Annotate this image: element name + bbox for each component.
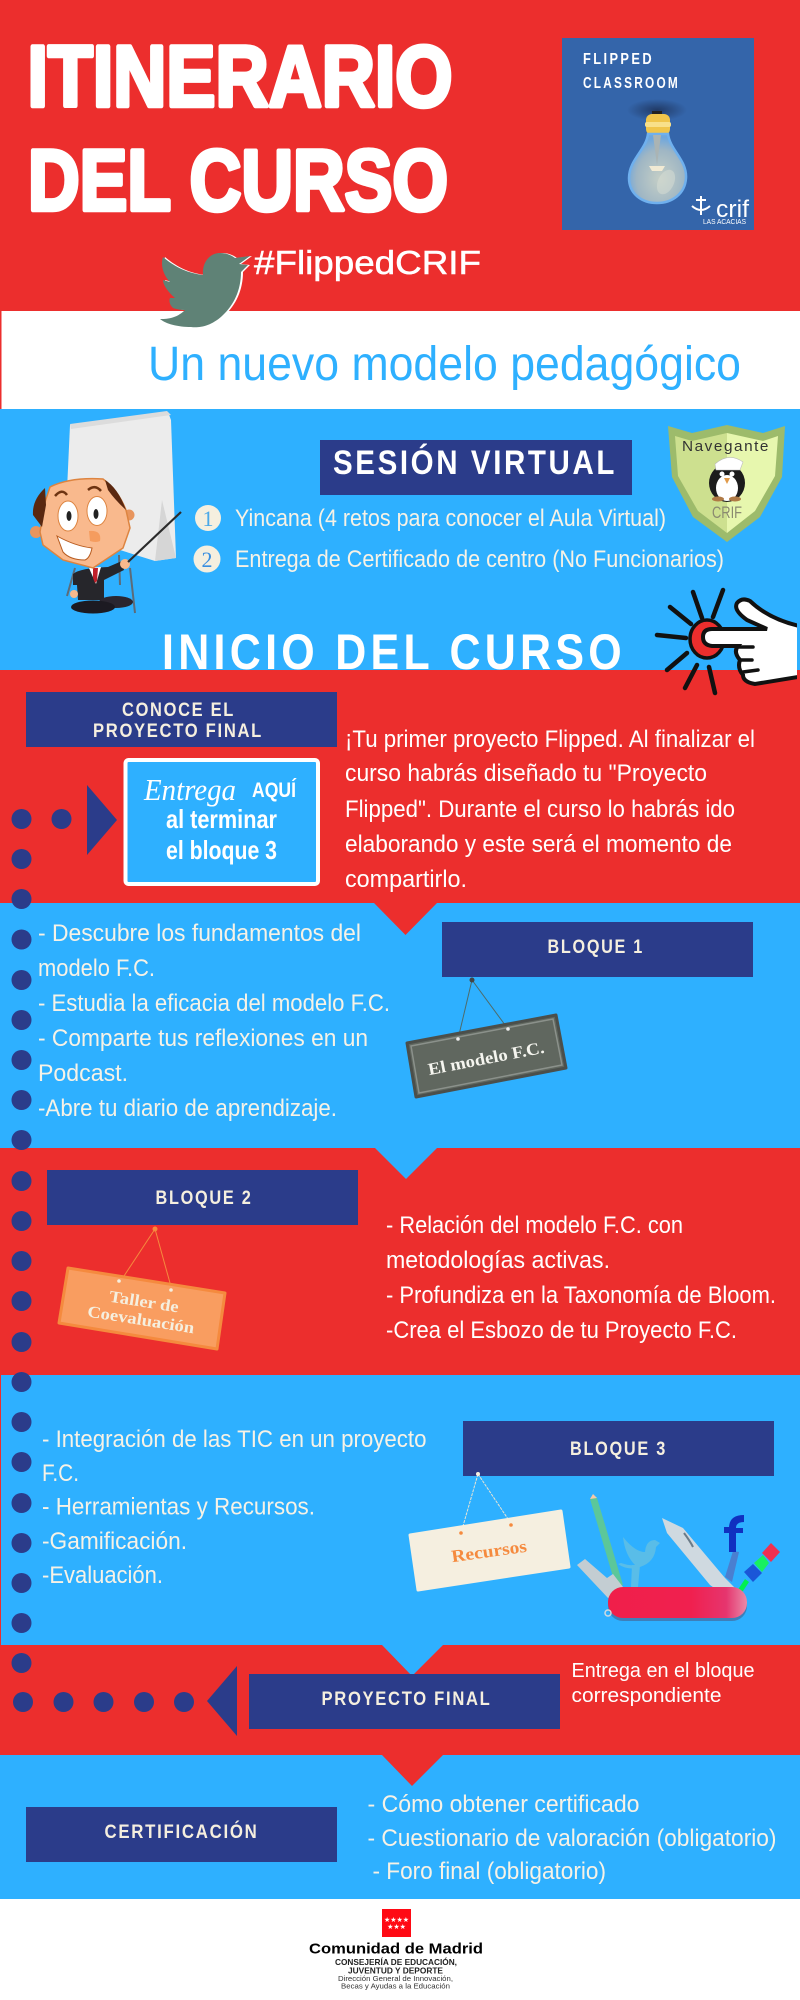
list item 1: 1	[202, 506, 214, 531]
callout: entrega aquí: el bloque 3	[166, 835, 277, 865]
text: bloque 2 contents	[386, 1212, 776, 1344]
text: certificación contents: - Cómo obtener certificado	[368, 1791, 640, 1818]
text: bloque 1 contents: modelo F.C.	[38, 955, 155, 982]
arrow: red notch	[374, 903, 437, 935]
heading: bloque 1: BLOQUE 1	[548, 937, 644, 958]
panel: certificación	[0, 1755, 800, 1899]
text: bloque 3 contents: F.C.	[42, 1460, 79, 1487]
text: proyecto flipped	[345, 726, 755, 893]
icon: flipped classroom poster: crif	[716, 196, 749, 223]
text: proyecto flipped: ¡Tu primer proyecto Flipped. Al finalizar el	[345, 726, 755, 753]
sign: el modelo f.c.	[407, 978, 566, 1097]
text: bloque 2 contents: -Crea el Esbozo de tu Proyecto F.C.	[386, 1317, 737, 1344]
text: bloque 1 contents: - Descubre los fundamentos del	[38, 920, 361, 947]
text: bloque 3 contents: -Evaluación.	[42, 1562, 163, 1589]
title: DEL CURSO	[28, 133, 448, 229]
callout: entrega aquí: al terminar	[166, 804, 277, 834]
list item 2: Entrega de Certificado de centro (No Funcionarios)	[235, 546, 724, 573]
heading: conoce el proyecto final: CONOCE EL	[122, 699, 235, 721]
subtitle band	[0, 311, 800, 409]
text: bloque 1 contents: - Comparte tus reflexiones en un	[38, 1025, 368, 1052]
icon: flipped classroom poster: LAS ACACIAS	[703, 219, 746, 226]
dotted trail	[12, 809, 194, 1712]
panel: header	[0, 0, 800, 409]
footer: comunidad de madrid logo	[309, 1909, 483, 1990]
heading: bloque 2: BLOQUE 2	[156, 1188, 252, 1209]
callout: entrega aquí: AQUÍ	[252, 779, 297, 802]
arrow: to entrega box	[87, 785, 117, 855]
text: proyecto flipped: curso habrás diseñado tu "Proyecto	[345, 760, 707, 787]
text: bloque 3 contents: - Integración de las TIC en un proyecto	[42, 1426, 426, 1453]
footer: comunidad de madrid logo: Comunidad de Madrid	[309, 1940, 483, 1958]
text: certificación contents: - Foro final (obligatorio)	[372, 1858, 606, 1885]
panel: conoce el proyecto final	[0, 670, 800, 903]
heading: inicio del curso: INICIO DEL CURSO	[162, 624, 626, 680]
text: certificación contents: - Cuestionario de valoración (obligatorio)	[368, 1825, 776, 1852]
panel: bloque 1	[0, 903, 800, 1148]
sign: taller de coevaluación	[59, 1226, 225, 1349]
text: bloque 2 contents: - Profundiza en la Taxonomía de Bloom.	[386, 1282, 776, 1309]
sign: recursos: Recursos	[450, 1536, 528, 1566]
text: bloque 3 contents	[42, 1426, 426, 1589]
badge: navegante crif: CRIF	[712, 503, 742, 522]
text: bloque 3 contents: - Herramientas y Recursos.	[42, 1494, 315, 1520]
heading: proyecto final: PROYECTO FINAL	[322, 1688, 492, 1710]
icon: twitter bird	[160, 253, 252, 327]
text: bloque 3 contents: -Gamificación.	[42, 1528, 187, 1555]
icon: flipped classroom poster	[562, 38, 754, 230]
arrow: red notch	[382, 1755, 443, 1786]
text: bloque 1 contents: - Estudia la eficacia del modelo F.C.	[38, 990, 390, 1017]
heading: sesión virtual: SESIÓN VIRTUAL	[333, 444, 617, 482]
heading: bloque 3	[463, 1421, 774, 1476]
list item 1: Yincana (4 retos para conocer el Aula Virtual)	[235, 505, 666, 532]
footer: comunidad de madrid logo: Becas y Ayudas a la Educación	[341, 1982, 450, 1990]
arrow: blue notch	[375, 1148, 437, 1179]
sign: el modelo f.c.: El modelo F.C.	[426, 1038, 546, 1079]
title: ITINERARIO	[28, 29, 452, 125]
sign: taller de coevaluación: Coevaluación	[86, 1302, 196, 1337]
panel: bloque 2	[0, 1148, 800, 1375]
panel: proyecto final	[0, 1645, 800, 1755]
heading: bloque 2	[47, 1170, 358, 1225]
footer: comunidad de madrid logo: CONSEJERÍA DE EDUCACIÓN,	[335, 1956, 457, 1967]
footer: comunidad de madrid logo: Dirección General de Innovación,	[338, 1974, 453, 1983]
text: entrega note: Entrega en el bloque	[572, 1660, 754, 1682]
text: bloque 2 contents: metodologías activas.	[386, 1247, 610, 1274]
heading: conoce el proyecto final	[26, 692, 337, 747]
heading: bloque 3: BLOQUE 3	[570, 1439, 667, 1460]
text: proyecto flipped: elaborando y este será el momento de	[345, 831, 732, 858]
text: proyecto flipped: compartirlo.	[345, 866, 467, 893]
panel: sesión virtual	[0, 409, 800, 680]
icon: flipped classroom poster: FLIPPED	[583, 51, 654, 68]
badge: navegante crif	[668, 425, 785, 542]
list item 2: 2	[202, 547, 212, 572]
badge: navegante crif: Navegante	[682, 438, 770, 455]
heading: proyecto final	[249, 1674, 560, 1729]
arrow: blue notch	[382, 1645, 443, 1676]
text: bloque 1 contents: -Abre tu diario de aprendizaje.	[38, 1095, 337, 1122]
footer: comunidad de madrid logo: ★★★★	[384, 1916, 409, 1924]
sign: recursos	[410, 1472, 569, 1590]
panel: bloque 3	[0, 1375, 800, 1645]
text: entrega note	[572, 1660, 754, 1707]
icon: finger pressing button	[657, 590, 800, 693]
hashtag: #FlippedCRIF	[254, 244, 481, 281]
callout: entrega aquí: Entrega	[143, 772, 236, 807]
icon: presenter with flipchart	[30, 411, 181, 614]
text: certificación contents	[368, 1791, 776, 1885]
text: bloque 2 contents: - Relación del modelo F.C. con	[386, 1212, 683, 1239]
icon: flipped classroom poster: CLASSROOM	[583, 75, 680, 92]
arrow: pointing left	[207, 1666, 237, 1736]
footer: comunidad de madrid logo: JUVENTUD Y DEPORTE	[348, 1966, 443, 1976]
text: bloque 1 contents: Podcast.	[38, 1060, 128, 1087]
heading: certificación	[26, 1807, 337, 1862]
footer: comunidad de madrid logo: ★★★	[387, 1923, 406, 1931]
callout: entrega aquí	[126, 760, 318, 884]
subtitle band: Un nuevo modelo pedagógico	[148, 338, 741, 391]
text: bloque 1 contents	[38, 920, 390, 1122]
sign: taller de coevaluación: Taller de	[108, 1287, 180, 1316]
text: entrega note: correspondiente	[572, 1685, 722, 1707]
heading: bloque 1	[442, 922, 753, 977]
title	[28, 29, 452, 229]
heading: certificación: CERTIFICACIÓN	[104, 1819, 258, 1843]
icon: swiss army knife with tools	[577, 1494, 780, 1621]
text: proyecto flipped: Flipped". Durante el curso lo habrás ido	[345, 796, 735, 823]
heading: conoce el proyecto final: PROYECTO FINAL	[93, 720, 263, 742]
heading: sesión virtual	[320, 440, 632, 495]
